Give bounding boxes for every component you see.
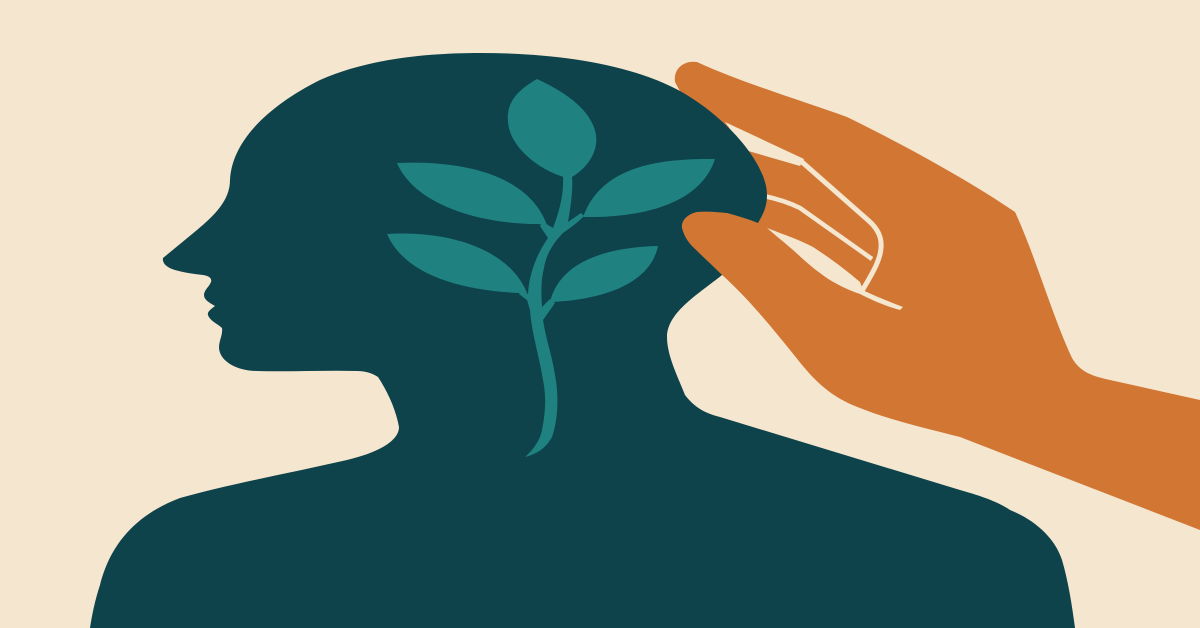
thumb over the head xyxy=(682,212,790,300)
leaf: lower left xyxy=(387,233,527,293)
leaf: upper right xyxy=(583,159,715,217)
leaf: top xyxy=(508,79,596,177)
hand: palm and fingers behind the head xyxy=(675,62,1200,530)
gaps between fingers xyxy=(725,122,903,310)
leaf: lower right xyxy=(550,246,658,302)
leaf: upper left xyxy=(397,163,547,225)
head and shoulders silhouette xyxy=(90,53,1075,628)
stem xyxy=(519,176,584,457)
plant xyxy=(387,79,715,457)
